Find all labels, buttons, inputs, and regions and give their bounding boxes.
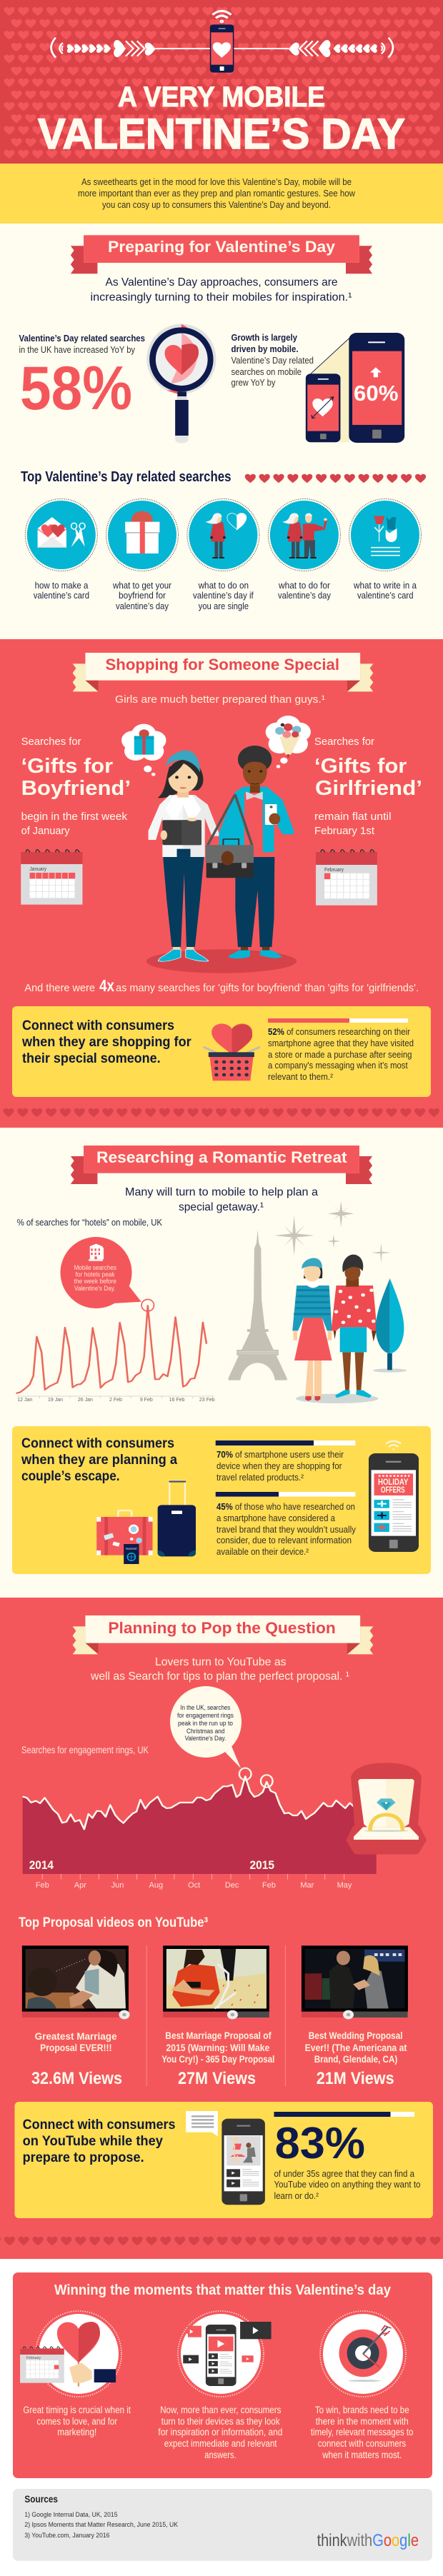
search item: how to make a valentine's card: valentine’s card	[34, 591, 89, 601]
line chart: hotel searches: 12 Jan	[17, 1398, 32, 1403]
title: VALENTINE’S DAY	[38, 110, 405, 158]
icon: left arrow	[51, 38, 210, 58]
callout bubble: searches peak	[170, 1686, 242, 1768]
icon: stars	[274, 1201, 391, 1263]
icon: phones with 60%	[306, 333, 404, 443]
callout bubble: mobile searches peak: Mobile searches	[74, 1264, 116, 1271]
video 3: Ever!! (The Americana at	[305, 2042, 407, 2053]
line chart: hotel searches: 19 Jan	[48, 1398, 63, 1403]
column: target: connect with consumers	[318, 2438, 406, 2449]
text: gifts for girlfriend: Girlfriend’	[315, 777, 422, 800]
text: 52% stat: smartphone agree that they have visited	[268, 1038, 414, 1048]
search icons row	[25, 498, 422, 611]
logo: think with Google: with	[347, 2531, 372, 2550]
intro band: you can cosy up to consumers this Valentine’s Day and beyond.	[102, 199, 331, 210]
panel: sources	[13, 2489, 432, 2561]
column: devices: answers.	[204, 2450, 237, 2460]
search item: how to make a valentine's card: how to make a	[35, 581, 88, 591]
icon: hotel	[89, 1244, 104, 1261]
callout bubble: mobile searches peak: for hotels peak	[76, 1271, 115, 1278]
search item: what to write in a card: valentine’s card	[357, 591, 414, 601]
search item: what to do if single: valentine’s day if	[193, 591, 254, 601]
video 3: Best Wedding Proposal	[309, 2030, 403, 2041]
subheading: increasingly turning to their mobiles for inspiration.¹	[90, 291, 352, 304]
video 3: Brand, Glendale, CA)	[314, 2053, 397, 2065]
search item: what to get your boyfriend: what to get your	[112, 581, 171, 591]
column: target: when it matters most.	[322, 2450, 402, 2460]
icon: January calendar	[21, 850, 82, 905]
bar: 70%	[216, 1440, 355, 1445]
subheading: well as Search for tips to plan the perfect proposal. ¹	[90, 1670, 349, 1683]
stat: growth driven by mobile: grew YoY by	[232, 378, 276, 388]
column: great timing: Great timing is crucial when it	[23, 2405, 131, 2415]
column: great timing: February	[26, 2356, 41, 2360]
search item: what to do if single: you are single	[199, 601, 249, 611]
callout bubble: searches peak: Christmas and	[186, 1728, 224, 1735]
intro band	[0, 164, 443, 224]
heading ribbon	[71, 1146, 372, 1184]
text: 52% stat: a store or made a purchase after seeing	[268, 1049, 412, 1060]
callout: connect when planning escape: when they are planning a	[21, 1453, 177, 1468]
video 1: 32.6M Views	[31, 2069, 122, 2088]
search item: what to get your boyfriend: boyfriend for	[119, 591, 166, 601]
illustration: couple holding hands	[292, 1255, 407, 1403]
icon: phone with holiday offers: HOLIDAY	[378, 1477, 408, 1487]
text: 70% stat	[216, 1449, 344, 1483]
line chart: hotel searches	[16, 1299, 215, 1403]
stat: 58%: in the UK have increased YoY by	[19, 345, 136, 355]
stat: 83%: 83%	[275, 2119, 365, 2168]
stat: 58%: 58%	[20, 354, 132, 423]
text: source list: 1) Google Internal Data, UK, 2015	[24, 2511, 118, 2519]
text: 45% stat	[216, 1501, 356, 1557]
area chart: engagement rings: Mar	[300, 1881, 314, 1890]
text: 83% stat: of under 35s agree that they can find a	[274, 2168, 415, 2179]
subheading	[90, 1656, 349, 1683]
text: 45% stat: a smartphone have considered a	[216, 1513, 336, 1523]
text: 4x as many searches: as many searches for 'gifts for boyfriend' than 'gifts for 'girlfriends'.	[116, 982, 419, 994]
heading: sources: Sources	[24, 2494, 58, 2505]
subheading	[125, 1186, 318, 1213]
text: 45% stat: available on their device.²	[216, 1546, 309, 1557]
column: devices: for inspiration or information, and	[158, 2427, 282, 2437]
bar: 52%	[268, 1018, 408, 1023]
heading ribbon	[73, 653, 373, 691]
text: 83% stat: YouTube video on anything they want to	[274, 2179, 420, 2190]
icon: heart on stick, hand and calendar	[20, 2322, 116, 2387]
video 3: 21M Views	[317, 2069, 394, 2088]
bar: 83%	[274, 2112, 414, 2117]
video 1	[22, 1945, 129, 2088]
callout bubble: searches peak: Valentine's Day.	[185, 1735, 226, 1742]
text: 70% stat: device when they are shopping for	[216, 1460, 342, 1471]
search item: what to get your boyfriend: valentine’s day	[116, 601, 169, 611]
text: gifts for girlfriend: ‘Gifts for	[314, 755, 407, 778]
column: devices: turn to their devices as they look	[161, 2416, 280, 2427]
icon: right arrow	[234, 38, 393, 58]
text: gifts for boyfriend: of January	[21, 825, 70, 837]
column: target	[311, 2311, 413, 2460]
column: great timing	[20, 2311, 131, 2437]
panel: winning the moments	[13, 2272, 432, 2478]
icon: Eiffel tower	[228, 1230, 287, 1380]
search item: what to get your boyfriend	[106, 498, 179, 611]
text: gifts for boyfriend: ‘Gifts for	[21, 755, 113, 778]
callout bubble: mobile searches peak: Valentine's Day.	[74, 1285, 115, 1292]
icon: January calendar: January	[30, 867, 46, 872]
videos row	[22, 1945, 408, 2088]
video 2: 2015 (Warning: Will Make	[166, 2042, 269, 2053]
icon: February calendar	[316, 850, 377, 906]
heading: top searches: Top Valentine’s Day related searches	[21, 468, 232, 485]
stat: growth driven by mobile: Growth is largely	[232, 333, 297, 343]
callout: connect on YouTube: Connect with consumers	[23, 2118, 175, 2133]
video 2: Best Marriage Proposal of	[165, 2030, 272, 2041]
line chart: hotel searches: 2 Feb	[109, 1398, 122, 1403]
panel: planning to pop the question	[0, 1598, 443, 2259]
illustration: couple with devices	[121, 716, 311, 973]
video 1: Proposal EVER!!!	[40, 2042, 112, 2053]
subheading: Many will turn to mobile to help plan a	[125, 1186, 318, 1198]
icon: phone with holiday offers: OFFERS	[381, 1485, 405, 1495]
bar: 45%	[216, 1492, 355, 1497]
area chart: engagement rings: Feb	[262, 1881, 276, 1890]
text: 52% stat	[268, 1026, 414, 1082]
line chart: hotel searches: 16 Feb	[169, 1398, 185, 1403]
column: target: there in the moment with	[316, 2416, 409, 2427]
area chart: engagement rings: Aug	[149, 1881, 163, 1890]
title: A VERY MOBILE	[118, 81, 325, 113]
column: devices: Now, more than ever, consumers	[160, 2405, 282, 2415]
stat: growth driven by mobile: Valentine’s Day related	[232, 356, 314, 366]
text: gifts for boyfriend	[21, 736, 131, 837]
text: 83% stat	[274, 2168, 420, 2201]
icon: phone with holiday offers	[369, 1441, 419, 1552]
icon: February calendar: February	[324, 868, 344, 873]
area chart: engagement rings: Oct	[188, 1881, 200, 1890]
area chart: engagement rings: Feb	[36, 1881, 49, 1890]
callout bubble: mobile searches peak: the week before	[74, 1278, 116, 1285]
callout bubble: searches peak: for engagement rings	[177, 1712, 234, 1719]
search item: what to write in a card: what to write in a	[353, 581, 417, 591]
logo: think with Google: think	[317, 2531, 347, 2550]
icon: luggage and passport: PASSPORT	[126, 1547, 137, 1550]
column: devices	[158, 2311, 282, 2460]
panel: researching a romantic retreat	[0, 1128, 443, 1598]
callout: connect on YouTube: prepare to propose.	[23, 2150, 144, 2165]
column: devices: expect immediate and relevant	[164, 2438, 277, 2449]
callout: connect when planning escape: Connect with consumers	[21, 1436, 174, 1451]
icon: ring box	[346, 1763, 427, 1855]
subheading: special getaway.¹	[179, 1201, 264, 1213]
video 2: 27M Views	[178, 2069, 256, 2088]
column: target: timely, relevant messages to	[311, 2427, 413, 2437]
line chart: hotel searches: 9 Feb	[140, 1398, 153, 1403]
icon: phones with 60%: 60%	[354, 381, 399, 406]
text: gifts for boyfriend: Boyfriend’	[21, 777, 131, 800]
area chart: engagement rings: Dec	[225, 1881, 239, 1890]
text: 4x as many searches	[24, 976, 419, 995]
panel: preparing for Valentine's Day	[0, 224, 443, 639]
video 2: You Cry!) - 365 Day Proposal	[161, 2053, 274, 2065]
search item: what to do for valentine's day: valentine’s day	[278, 591, 332, 601]
subheading: As Valentine’s Day approaches, consumers are	[106, 276, 338, 289]
heading ribbon: Planning to Pop the Question	[108, 1619, 336, 1637]
illustration: Eiffel tower, stars and couple	[228, 1201, 407, 1403]
chart title: Searches for engagement rings, UK	[21, 1745, 149, 1755]
text: 45% stat: consider, due to relevant information	[216, 1535, 352, 1545]
text: 52% stat: a company's messaging when it's most	[268, 1060, 408, 1071]
callout bubble: searches peak: In the UK, searches	[180, 1704, 231, 1711]
column: target: To win, brands need to be	[315, 2405, 409, 2415]
text: gifts for girlfriend: Searches for	[314, 736, 374, 748]
search item: what to do for valentine's day	[268, 498, 340, 601]
subheading: Girls are much better prepared than guys.¹	[115, 693, 325, 706]
text: 83% stat: learn or do.²	[274, 2190, 319, 2201]
text: gifts for boyfriend: Searches for	[21, 736, 81, 748]
subheading: Lovers turn to YouTube as	[155, 1656, 286, 1668]
stat: growth driven by mobile	[232, 333, 314, 388]
icon: magnifying glass with heart	[146, 324, 216, 443]
text: 70% stat: 70% of smartphone users use their	[216, 1449, 344, 1460]
area chart: engagement rings: 2015	[250, 1858, 274, 1872]
stat: growth driven by mobile: driven by mobile.	[232, 344, 299, 354]
text: 45% stat: 45% of those who have researched on	[216, 1501, 355, 1512]
text: gifts for girlfriend: remain flat until	[314, 811, 392, 823]
panel: shopping for someone special	[0, 639, 443, 1128]
intro band: As sweethearts get in the mood for love this Valentine’s Day, mobile will be	[81, 176, 352, 187]
thought bubble: gift	[121, 724, 166, 776]
text: 70% stat: travel related products.²	[216, 1472, 304, 1483]
icon: target with arrow	[339, 2326, 392, 2382]
icon: speech bubble and phone with video	[186, 2111, 265, 2205]
callout: connect when planning escape	[12, 1426, 431, 1574]
search item: how to make a valentine's card	[25, 498, 97, 601]
thought bubble: bouquet	[266, 716, 311, 768]
area chart: engagement rings: Jun	[111, 1881, 124, 1890]
heading ribbon: Preparing for Valentine’s Day	[108, 238, 336, 256]
chart title: % of searches for “hotels” on mobile, UK	[17, 1218, 163, 1228]
heading ribbon	[71, 235, 372, 274]
header banner	[0, 0, 443, 164]
area chart: engagement rings: Apr	[74, 1881, 86, 1890]
title	[38, 81, 405, 158]
search item: what to write in a card	[349, 498, 422, 601]
area chart: engagement rings: 2014	[29, 1858, 54, 1872]
line chart: hotel searches: 23 Feb	[199, 1398, 215, 1403]
area chart: engagement rings	[23, 1768, 377, 1890]
callout: connect when planning escape: couple’s escape.	[21, 1469, 120, 1484]
text: source list: 2) Ipsos Moments that Matter Research, June 2015, UK	[24, 2521, 179, 2529]
line chart: hotel searches: 26 Jan	[78, 1398, 93, 1403]
intro band: more important than ever as they prep and plan romantic gestures. See how	[78, 188, 356, 199]
illustration: boy	[206, 746, 294, 958]
search item: what to do for valentine's day: what to do for	[278, 581, 330, 591]
text: 45% stat: travel brand that they wouldn’t usually	[216, 1524, 356, 1535]
illustration: girl	[149, 751, 219, 961]
video 1: Greatest Marriage	[35, 2030, 117, 2042]
text: 4x as many searches: 4x	[99, 976, 114, 995]
video 3	[302, 1945, 408, 2088]
heading: Winning the moments that matter this Valentine’s day	[54, 2282, 392, 2298]
search item: what to do if single	[187, 498, 259, 611]
text: 52% stat: 52% of consumers researching on their	[268, 1026, 411, 1037]
logo: think with Google	[317, 2531, 419, 2550]
callout: connect when shopping	[12, 1006, 431, 1097]
icon: basket with heart	[204, 1023, 260, 1081]
ground shadow	[146, 949, 297, 973]
logo: think with Google: Google	[372, 2531, 419, 2550]
icon: hearts and arrows signal with phone	[51, 11, 393, 73]
icon: luggage and passport	[96, 1480, 196, 1564]
text: source list	[24, 2511, 179, 2540]
heading: top proposal videos: Top Proposal videos on YouTube³	[19, 1915, 208, 1930]
stat: growth driven by mobile: searches on mobile	[232, 367, 302, 377]
area chart: engagement rings: May	[337, 1881, 352, 1890]
text: gifts for girlfriend	[314, 736, 422, 837]
callout bubble: searches peak: peak in the run up to	[178, 1720, 233, 1727]
text: source list: 3) YouTube.com, January 2016	[24, 2532, 109, 2540]
callout: connect when shopping: their special someone.	[22, 1051, 161, 1066]
column: great timing: comes to love, and for	[36, 2416, 118, 2427]
callout: connect when shopping: when they are shopping for	[21, 1035, 191, 1050]
subheading	[90, 276, 352, 304]
text: gifts for girlfriend: February 1st	[314, 825, 375, 837]
callout: connect on YouTube	[14, 2102, 433, 2218]
icon: phone	[210, 24, 234, 73]
callout: connect on YouTube: on YouTube while they	[23, 2134, 163, 2149]
video 2	[161, 1945, 274, 2088]
search item: what to do if single: what to do on	[198, 581, 249, 591]
icon: wifi signal	[212, 11, 231, 22]
heading ribbon	[73, 1615, 373, 1654]
heading ribbon: Researching a Romantic Retreat	[96, 1148, 347, 1166]
text: 4x as many searches: And there were	[24, 982, 95, 994]
stat: 58%: Valentine’s Day related searches	[19, 334, 145, 344]
heading: top searches	[21, 468, 427, 485]
callout bubble: mobile searches peak	[60, 1237, 141, 1308]
icon: phone with video tiles	[183, 2322, 272, 2386]
heading ribbon: Shopping for Someone Special	[106, 656, 339, 673]
callout: connect when shopping: Connect with consumers	[22, 1018, 174, 1033]
text: gifts for boyfriend: begin in the first week	[21, 811, 128, 823]
text: 52% stat: relevant to them.²	[268, 1071, 334, 1082]
column: great timing: marketing!	[57, 2427, 96, 2437]
